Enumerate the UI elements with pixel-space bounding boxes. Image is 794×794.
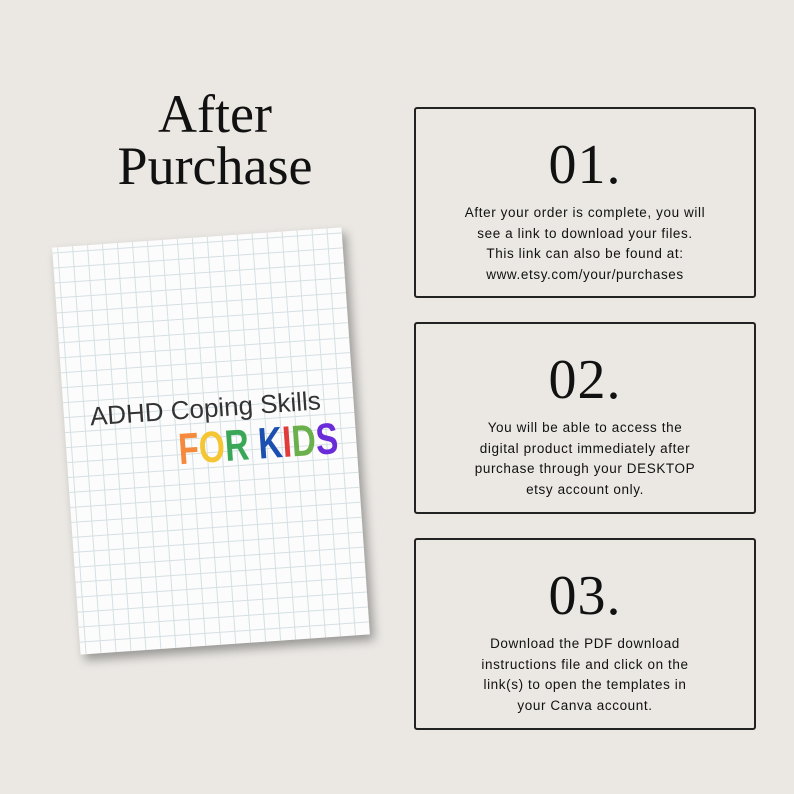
product subtitle: FOR KIDS	[177, 414, 340, 474]
step text: Download the PDF download	[490, 636, 680, 651]
step number: 03.	[548, 565, 622, 627]
step text: etsy account only.	[526, 482, 644, 496]
step text: After your order is complete, you will	[465, 205, 705, 220]
step text: You will be able to access the	[488, 420, 682, 435]
step text: www.etsy.com/your/purchases	[486, 266, 684, 282]
step text	[481, 636, 689, 713]
step text: see a link to download your files.	[477, 226, 693, 240]
step text: link(s) to open the templates in	[483, 677, 687, 692]
step number: 01.	[548, 134, 622, 196]
title	[118, 84, 312, 196]
step text: purchase through your DESKTOP	[475, 461, 695, 476]
step text	[464, 205, 705, 282]
product mockup	[52, 227, 370, 655]
title: Purchase	[118, 136, 312, 196]
panel: step 1	[414, 107, 756, 298]
step text: instructions file and click on the	[481, 656, 689, 672]
title: After	[158, 84, 272, 144]
step number: 02.	[548, 349, 622, 411]
product title: ADHD Coping Skills	[89, 385, 322, 431]
step text	[475, 420, 695, 497]
step text: This link can also be found at:	[486, 246, 684, 261]
panel: step 3	[414, 538, 756, 730]
step text: your Canva account.	[517, 698, 653, 712]
panel: step 2	[414, 322, 756, 514]
step text: digital product immediately after	[480, 440, 690, 456]
